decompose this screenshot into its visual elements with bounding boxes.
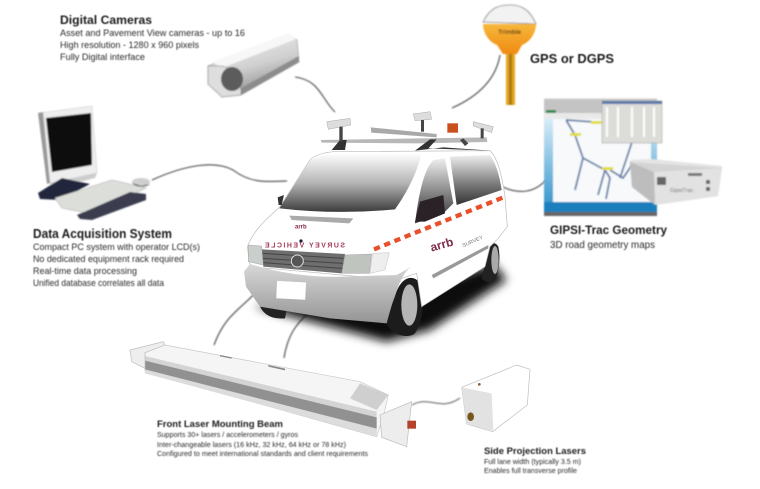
title: digital cameras: Asset and Pavement View cameras - up to 16 — [60, 28, 245, 39]
icon: GIPSI-Trac hardware box — [629, 159, 722, 205]
van ground shadow — [253, 263, 507, 342]
label: GPS or DGPS: GPS or DGPS — [530, 51, 614, 66]
text: front laser mounting beam: Front Laser Mounting Beam — [157, 419, 283, 429]
text: data acquisition system: Real-time data processing — [33, 266, 137, 277]
text: side projection lasers: Full lane width (typically 3.5 m) — [484, 457, 581, 466]
van hazard stripe — [374, 197, 503, 249]
van windscreen — [279, 154, 422, 212]
title: digital cameras: High resolution - 1280 x 960 pixels — [60, 40, 199, 51]
van body — [247, 151, 507, 307]
icon: GPS antenna — [483, 5, 536, 105]
van side stripe — [432, 245, 488, 278]
text: front laser mounting beam: Configured to meet international standards and client requirements — [157, 451, 369, 458]
van logos and lettering: arrb — [295, 225, 307, 231]
text: data acquisition system — [33, 227, 200, 289]
text: side projection lasers — [484, 446, 586, 475]
text: GIPSI-Trac Geometry — [550, 223, 667, 251]
connecting cables — [152, 55, 546, 405]
van grille — [262, 249, 345, 273]
icon: GPS antenna: Trimble — [498, 29, 522, 36]
text: data acquisition system: No dedicated equipment rack required — [33, 254, 184, 265]
text: side projection lasers: Side Projection Lasers — [484, 446, 586, 457]
text: GIPSI-Trac Geometry: GIPSI-Trac Geometry — [550, 223, 667, 237]
title: digital cameras: Fully Digital interface — [60, 52, 145, 63]
text: front laser mounting beam — [157, 419, 369, 458]
roof beacon — [447, 123, 458, 133]
illustration: survey van: SURVEY VEHICLE — [265, 242, 345, 249]
illustration: survey van: SURVEY — [462, 235, 484, 249]
text: front laser mounting beam: Supports 30+ lasers / accelerometers / gyros — [157, 432, 299, 439]
van side windows — [415, 158, 453, 223]
panel: software screenshot and hardware — [544, 98, 662, 216]
icon: GIPSI-Trac hardware box: GipsiTrac — [670, 188, 694, 194]
van hood vents — [289, 216, 353, 223]
van headlights — [248, 245, 263, 265]
van bumper — [244, 264, 412, 323]
icon: computer workstation — [38, 106, 150, 220]
van mirror — [415, 195, 445, 222]
illustration: front laser mounting beam — [130, 342, 416, 447]
title: digital cameras — [60, 13, 245, 63]
text: front laser mounting beam: Inter-changeable lasers (16 kHz, 32 kHz, 64 kHz or 78 kHz) — [157, 442, 346, 449]
van roof rack — [321, 137, 487, 143]
text: GIPSI-Trac Geometry: 3D road geometry maps — [550, 240, 655, 251]
icon: security camera — [208, 33, 299, 97]
illustration: survey van — [244, 112, 507, 342]
roof cameras — [327, 118, 351, 129]
text: data acquisition system: Compact PC system with operator LCD(s) — [33, 242, 200, 253]
text: data acquisition system: Unified database correlates all data — [33, 278, 165, 289]
van wheels — [260, 243, 499, 336]
title: digital cameras: Digital Cameras — [60, 13, 152, 27]
icon: side projection laser box — [462, 365, 530, 432]
illustration: survey van: arrb — [429, 235, 455, 255]
text: side projection lasers: Enables full transverse profile — [484, 466, 577, 475]
text: data acquisition system: Data Acquisition System — [33, 227, 172, 241]
